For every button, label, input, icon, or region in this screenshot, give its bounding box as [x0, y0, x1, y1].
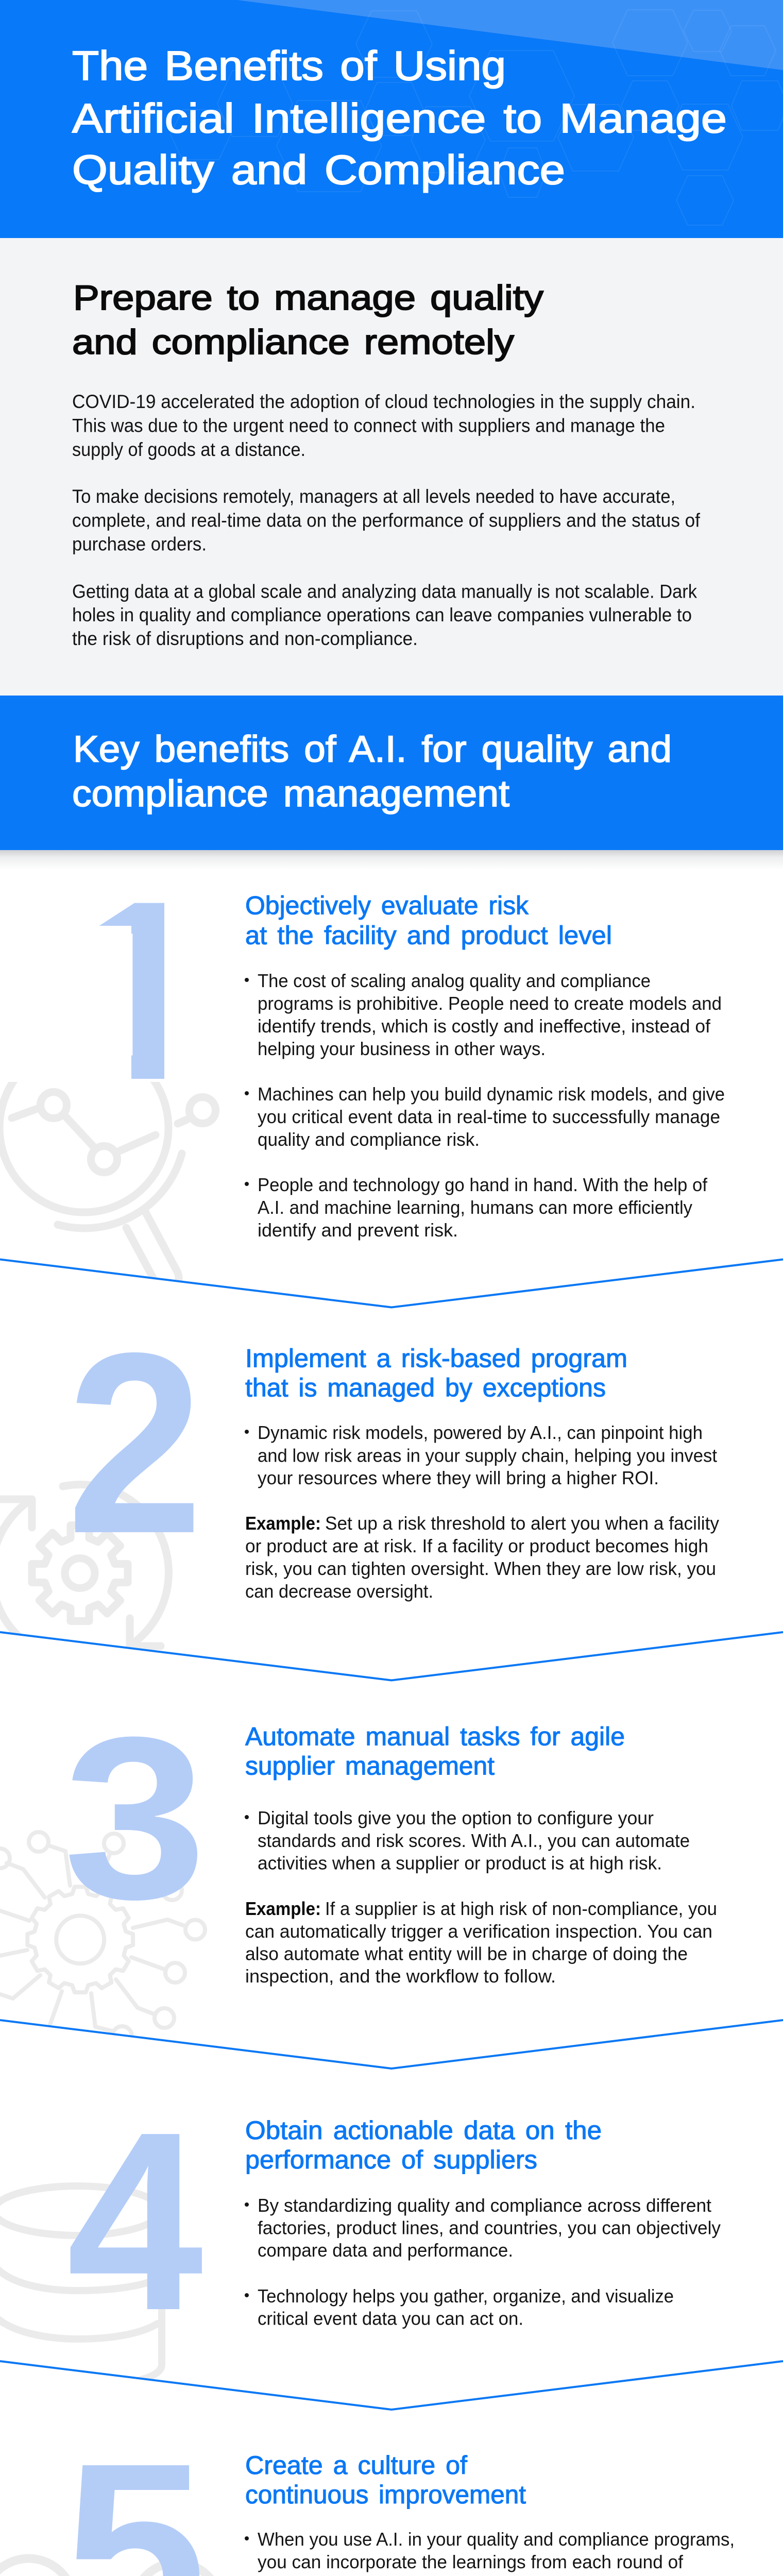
heading: benefit 3	[245, 1722, 625, 1781]
text block: example 3: inspection, and the workflow to follow.	[245, 1965, 556, 1987]
bullet: dynamic risk models	[245, 1422, 717, 1488]
title: Quality and Compliance	[72, 147, 565, 193]
number 2: 2	[67, 1299, 203, 1587]
text block: paragraph 1: supply of goods at a distance.	[72, 439, 305, 460]
bullet: use of A.I.: you can incorporate the learnings from each round of	[258, 2551, 684, 2572]
title: The Benefits of Using	[72, 43, 506, 89]
bullet: dynamic risk models: and low risk areas in your supply chain, helping you invest	[258, 1445, 717, 1466]
bullet: cost of scaling: The cost of scaling analog quality and compliance	[258, 970, 651, 991]
heading: benefit 4: performance of suppliers	[245, 2145, 537, 2174]
bullet: use of A.I.	[245, 2529, 735, 2576]
heading: benefit 3: supplier management	[245, 1752, 495, 1781]
bullet: standardizing: compare data and performance.	[258, 2240, 513, 2261]
bullet: cost of scaling: identify trends, which is costly and ineffective, instead of	[258, 1015, 711, 1037]
bullet: cost of scaling	[245, 970, 722, 1059]
bullet: people and technology: A.I. and machine learning, humans can more efficiently	[258, 1197, 692, 1218]
bullet: machines: Machines can help you build dynamic risk models, and give	[258, 1083, 725, 1105]
text block: paragraph 3	[72, 581, 697, 649]
text block: paragraph 3: holes in quality and compliance operations can leave companies vulnerable to	[72, 604, 692, 625]
text block: example 2: risk, you can tighten oversight. When they are low risk, you	[245, 1558, 716, 1579]
bullet: cost of scaling: helping your business in other ways.	[258, 1038, 546, 1059]
bullet: people and technology: identify and prevent risk.	[258, 1219, 458, 1241]
heading: benefit 2: that is managed by exceptions	[245, 1374, 606, 1402]
heading: benefit 5: continuous improvement	[245, 2480, 526, 2509]
header shadow	[0, 850, 783, 870]
bullet: technology: critical event data you can act on.	[258, 2308, 523, 2329]
heading: benefit 1	[245, 891, 612, 950]
bullet: technology	[245, 2285, 674, 2329]
text block: example 2: Example:	[245, 1513, 321, 1534]
bullet: people and technology	[245, 1174, 708, 1241]
panel: key benefits heading	[0, 696, 783, 850]
bullet: dynamic risk models: your resources where they will bring a higher ROI.	[258, 1467, 659, 1488]
panel: key benefits heading: Key benefits of A.I. for quality and	[73, 728, 672, 770]
icon: gear network	[0, 1832, 205, 2046]
panel: title header	[0, 0, 783, 238]
heading: benefit 2	[245, 1344, 627, 1402]
heading: benefit 1: at the facility and product level	[245, 921, 612, 950]
bullet: technology: Technology helps you gather, organize, and visualize	[258, 2285, 674, 2307]
text block: example 2: or product are at risk. If a facility or product becomes high	[245, 1535, 708, 1556]
icon: gear with cycle arrows	[0, 1485, 168, 1646]
text block: paragraph 2: purchase orders.	[72, 534, 207, 554]
heading: benefit 4: Obtain actionable data on the	[245, 2116, 602, 2145]
bullet: digital tools: Digital tools give you the option to configure your	[258, 1807, 654, 1828]
title	[72, 43, 727, 193]
title: Artificial Intelligence to Manage	[72, 95, 727, 141]
bullet: digital tools	[245, 1807, 690, 1873]
bullet: people and technology: People and technology go hand in hand. With the help of	[258, 1174, 708, 1195]
heading: benefit 1: Objectively evaluate risk	[245, 891, 529, 920]
text block: example 2: can decrease oversight.	[245, 1581, 433, 1602]
text block: paragraph 3: the risk of disruptions and non-compliance.	[72, 628, 418, 649]
text block: paragraph 2: To make decisions remotely, managers at all levels needed to have accurate,	[72, 486, 675, 507]
text block: example 3: also automate what entity will be in charge of doing the	[245, 1943, 688, 1964]
bullet: machines: quality and compliance risk.	[258, 1129, 480, 1150]
icon: team of people	[0, 2558, 237, 2576]
panel: prepare remotely	[0, 238, 783, 696]
bullet: standardizing: factories, product lines, and countries, you can objectively	[258, 2217, 721, 2238]
bullet: standardizing	[245, 2195, 721, 2261]
text block: paragraph 2: complete, and real-time data on the performance of suppliers and the status of	[72, 510, 701, 531]
panel: benefit 5	[0, 2455, 733, 2576]
bullet: machines: you critical event data in real-time to successfully manage	[258, 1106, 720, 1127]
panel: benefit 1	[0, 847, 725, 1288]
panel: benefit 2	[0, 1299, 719, 1646]
panel: benefit 3	[0, 1689, 717, 2046]
text block: example 2	[245, 1513, 719, 1602]
text block: paragraph 2	[72, 486, 701, 554]
bullet: cost of scaling: programs is prohibitive. People need to create models and	[258, 993, 722, 1014]
text block: paragraph 3: Getting data at a global scale and analyzing data manually is not scalable. Dark	[72, 581, 697, 602]
text block: paragraph 1: This was due to the urgent need to connect with suppliers and manage the	[72, 415, 665, 436]
bullet: use of A.I.: When you use A.I. in your quality and compliance programs,	[258, 2529, 735, 2550]
text block: example 2: Set up a risk threshold to alert you when a facility	[325, 1513, 719, 1534]
text block: paragraph 1: COVID-19 accelerated the adoption of cloud technologies in the supply chain.	[72, 391, 695, 412]
bullet: digital tools: standards and risk scores. With A.I., you can automate	[258, 1830, 690, 1851]
text block: paragraph 1	[72, 391, 695, 460]
text block: example 3: Example:	[245, 1898, 321, 1919]
number 3: 3	[63, 1689, 207, 1947]
number 4: 4	[67, 2079, 205, 2363]
heading: benefit 3: Automate manual tasks for agile	[245, 1722, 625, 1751]
heading: benefit 4	[245, 2116, 602, 2174]
bullet: machines	[245, 1083, 725, 1150]
heading: prepare: Prepare to manage quality	[73, 278, 543, 317]
text block: example 3	[245, 1898, 717, 1987]
heading: prepare	[72, 278, 543, 362]
heading: benefit 2: Implement a risk-based program	[245, 1344, 627, 1372]
bullet: digital tools: activities when a supplier or product is at high risk.	[258, 1853, 662, 1873]
panel: benefit 4	[0, 2120, 721, 2379]
decorative light triangle	[237, 0, 783, 70]
heading: benefit 5: Create a culture of	[245, 2451, 467, 2480]
heading: benefit 5	[245, 2451, 526, 2509]
bullet: dynamic risk models: Dynamic risk models, powered by A.I., can pinpoint high	[258, 1422, 703, 1443]
icon: magnifier with graph	[0, 1082, 219, 1281]
heading: prepare: and compliance remotely	[72, 323, 514, 362]
bullet: standardizing: By standardizing quality and compliance across different	[258, 2195, 711, 2216]
text block: example 3: If a supplier is at high risk of non-compliance, you	[325, 1898, 717, 1919]
number 1: 1	[72, 847, 216, 1138]
icon: database	[0, 2186, 162, 2380]
text block: example 3: can automatically trigger a verification inspection. You can	[245, 1921, 712, 1942]
decorative hexagon pattern	[171, 10, 783, 225]
panel: key benefits heading: compliance management	[72, 773, 509, 815]
